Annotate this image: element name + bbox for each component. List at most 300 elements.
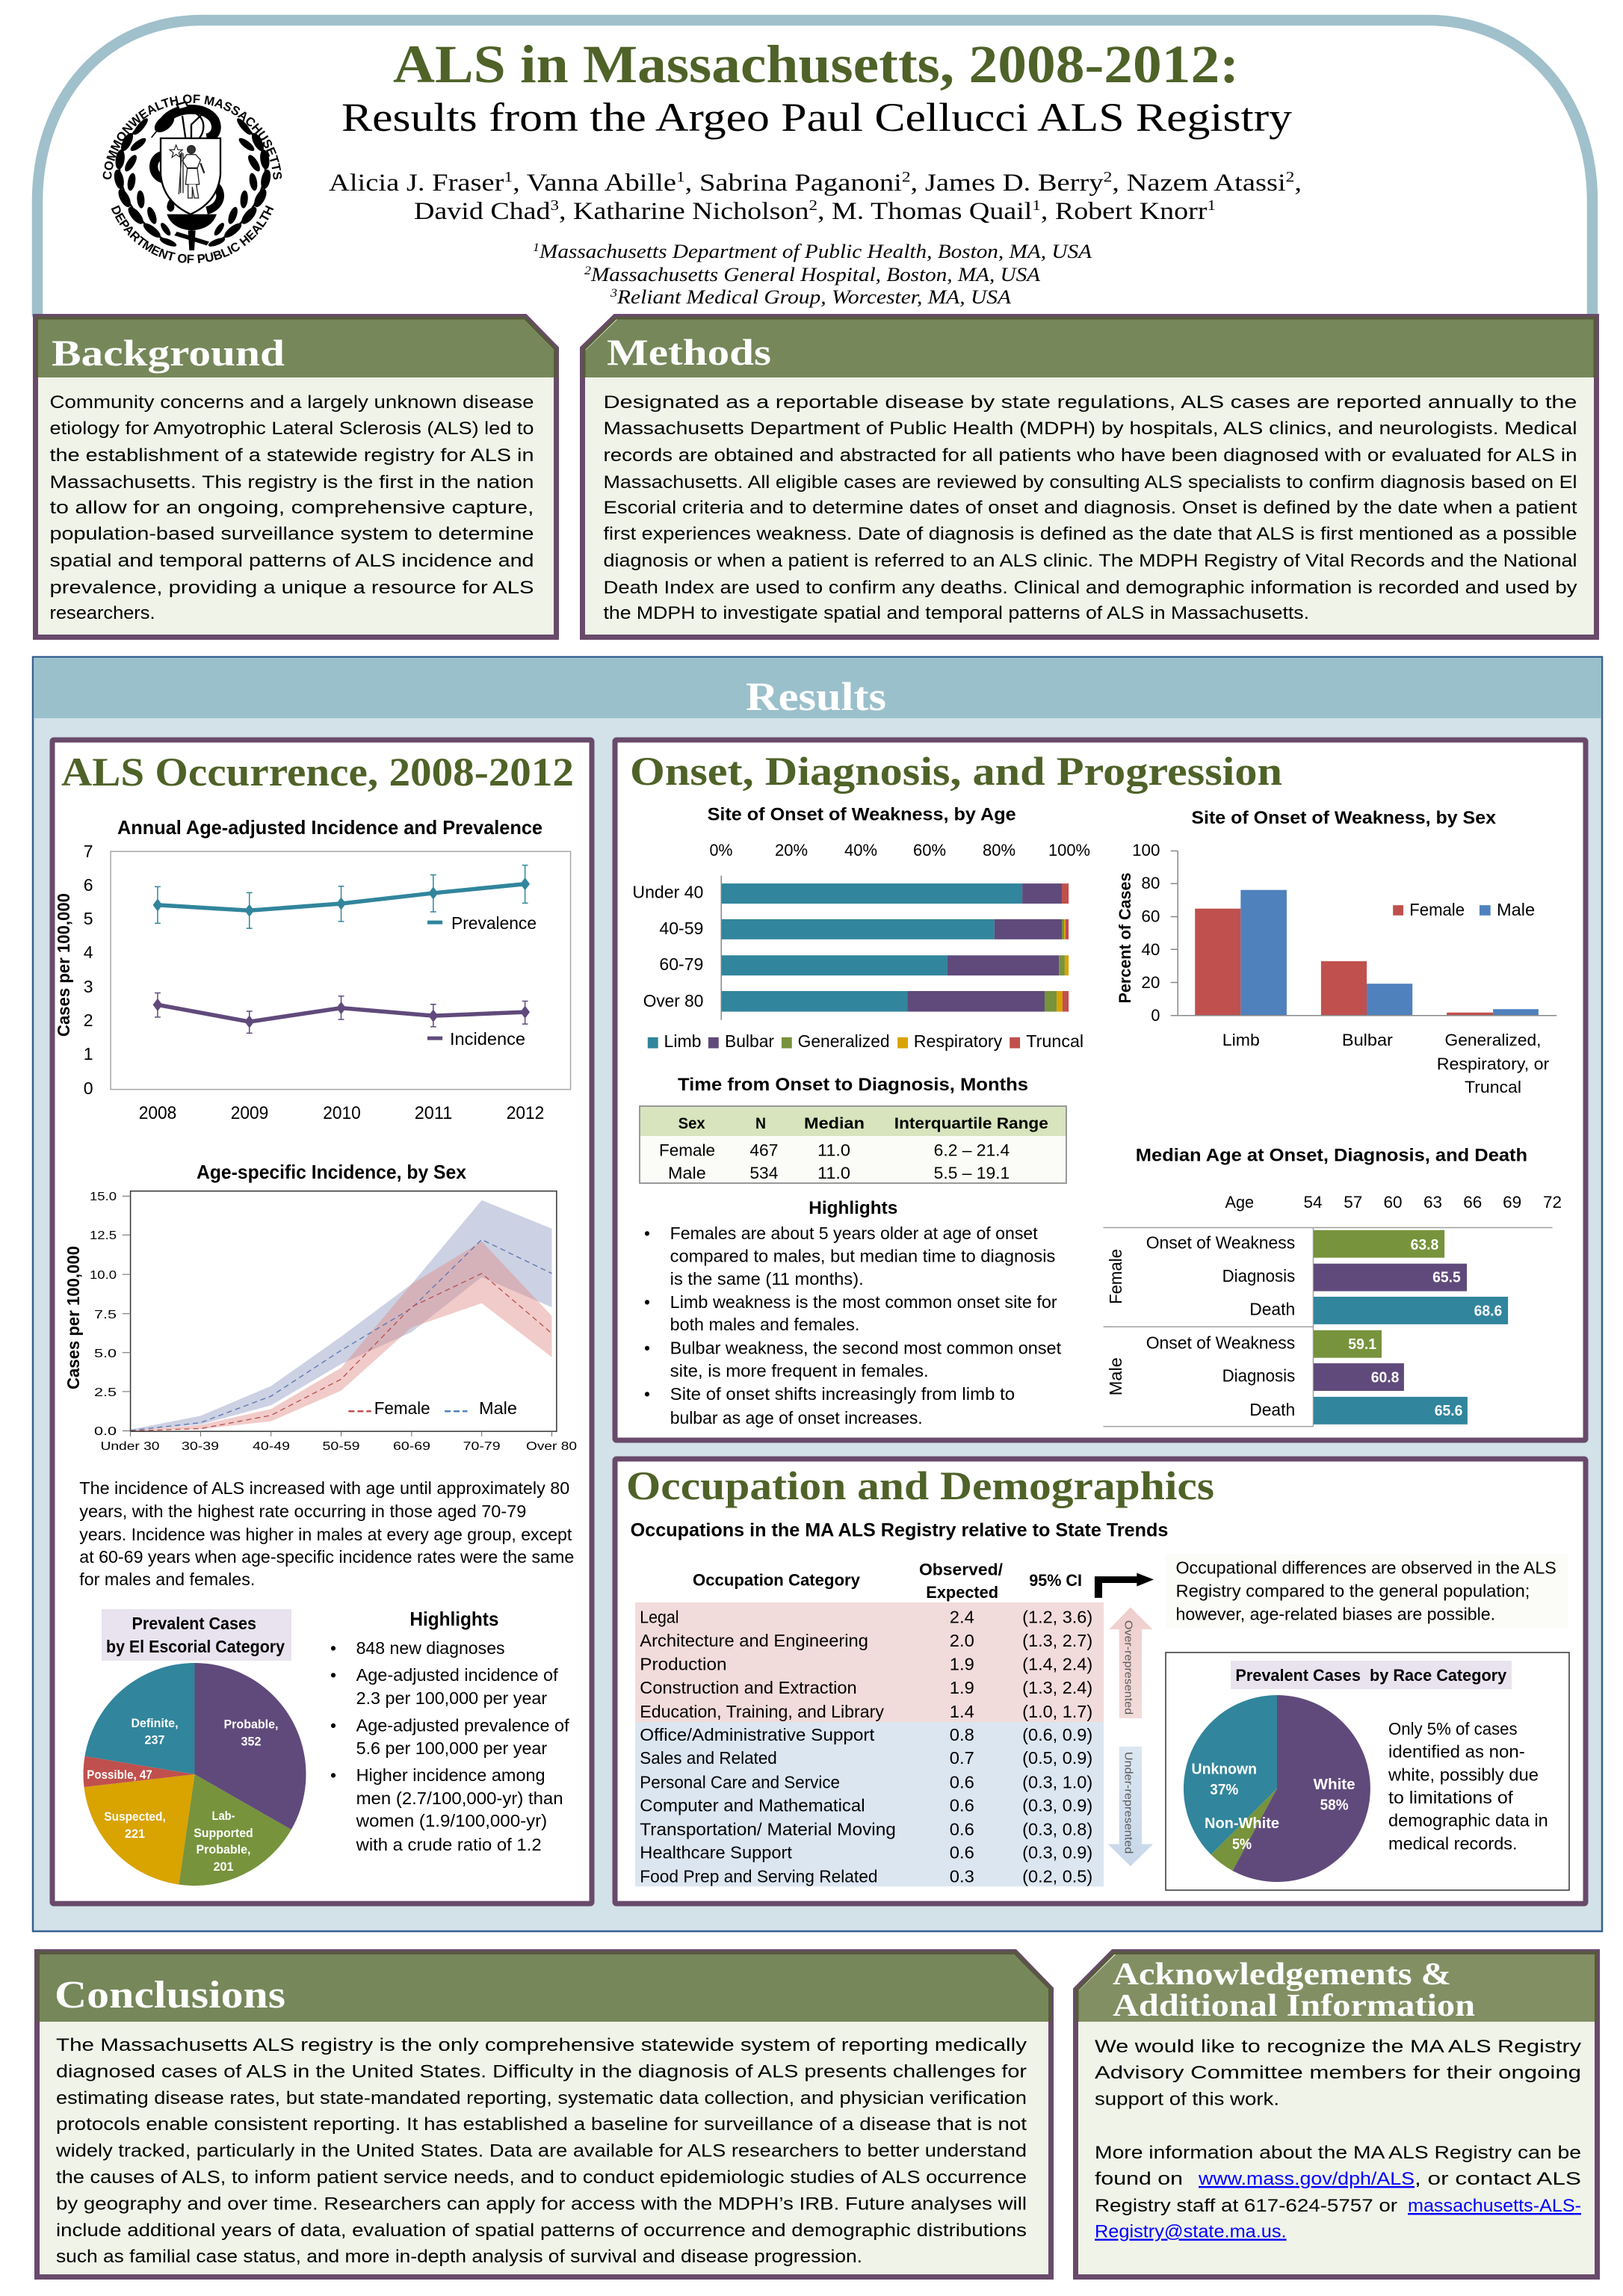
star (170, 145, 182, 158)
heading: conclusions: Conclusions (55, 1974, 285, 2016)
sex group labels: Female (1106, 1249, 1125, 1304)
x axis labels: Under 30 (100, 1440, 160, 1453)
pie note: demographic data in (1388, 1811, 1548, 1830)
highlights list: • (644, 1339, 650, 1358)
authors: , (1294, 170, 1302, 197)
percent axis: 0% (710, 841, 732, 860)
seal text top: COMMONWEALTH OF MASSACHUSETTS (103, 94, 282, 179)
text: acknowledgements: , or contact ALS (1415, 2169, 1581, 2189)
pie note: medical records. (1388, 1834, 1518, 1854)
text: methods: Death Index are used to confirm any deaths. Clinical and demographic information is recorded and used by (604, 578, 1577, 598)
pie labels: Lab- (212, 1809, 235, 1823)
plot lines and markers (111, 851, 571, 1090)
x axis labels: 2012 (507, 1103, 544, 1123)
text: acknowledgements: Advisory Committee members for their ongoing (1095, 2063, 1581, 2083)
heading: occupation: Occupation and Demographics (626, 1463, 1214, 1508)
table body: Sex (678, 1115, 705, 1132)
callout: occupational differences: Registry compared to the general population; (1176, 1581, 1530, 1601)
authors: 1 (1032, 197, 1041, 214)
percent axis: 100% (1048, 841, 1090, 860)
y axis labels (1132, 841, 1160, 1025)
y axis labels: 7 (84, 842, 93, 861)
legend labels: Limb (664, 1031, 701, 1051)
y axis labels: 0 (1151, 1006, 1160, 1025)
highlights list: site, is more frequent in females. (670, 1361, 929, 1380)
observed expected values: 0.6 (950, 1843, 974, 1863)
authors: 2 (902, 169, 911, 185)
sex group labels (1106, 1249, 1125, 1395)
highlights list: Females are about 5 years older at age of onset (670, 1223, 1038, 1243)
highlights list: • (644, 1292, 650, 1312)
authors: 1 (676, 169, 685, 185)
highlights list: 2.3 per 100,000 per year (356, 1688, 548, 1708)
row labels (1146, 1232, 1295, 1419)
authors: , Sabrina Paganoni (685, 170, 902, 197)
observed expected values: 0.6 (950, 1795, 974, 1815)
observed expected values: 0.3 (950, 1867, 974, 1886)
y axis labels: 2.5 (94, 1386, 117, 1399)
authors: 2 (1286, 169, 1294, 185)
authors: , M. Thomas Quail (817, 198, 1032, 225)
bar chart: median age (1103, 1145, 1562, 1427)
pie title: by El Escorial Category (106, 1637, 285, 1656)
observed expected values: 0.7 (950, 1748, 974, 1768)
occupation names: Architecture and Engineering (640, 1631, 868, 1650)
category labels: Limb (1222, 1031, 1260, 1049)
text: methods: Escorial criteria and to determine dates of onset and diagnosis. Onset is defined by the date when a patient (604, 498, 1577, 518)
x axis labels: 2008 (139, 1103, 176, 1123)
highlights list: with a crude ratio of 1.2 (356, 1835, 542, 1854)
y axis labels: 4 (84, 942, 93, 962)
text: incidence description: at 60-69 years when age-specific incidence rates were the same (79, 1547, 574, 1567)
staff (182, 114, 203, 138)
age group labels: Under 40 (632, 883, 703, 902)
text: methods (604, 392, 1577, 623)
table body: Male (668, 1164, 706, 1182)
text: conclusions: widely tracked, particularly in the United States. Data are available for ALS researchers to better understand (55, 2141, 1027, 2161)
observed expected values: 1.9 (950, 1655, 974, 1674)
authors: 2 (809, 197, 817, 214)
text: acknowledgements: massachusetts-ALS- (1408, 2196, 1581, 2216)
affiliations: Massachusetts Department of Public Health, Boston, MA, USA (539, 241, 1092, 262)
pie note: to limitations of (1388, 1788, 1513, 1807)
pie labels: 201 (214, 1860, 233, 1874)
bar values: 60.8 (1371, 1370, 1399, 1386)
column headers: Expected (926, 1583, 998, 1602)
authors: David Chad (414, 198, 533, 225)
legend: incidence: Incidence (450, 1029, 525, 1049)
age axis: 57 (1344, 1193, 1362, 1212)
confidence intervals (1022, 1607, 1092, 1886)
legend labels: Respiratory (914, 1031, 1003, 1051)
text: background: the establishment of a statewide registry for ALS in (49, 445, 534, 466)
panel: conclusions (37, 1952, 1051, 2277)
table body: Female (659, 1141, 715, 1160)
arrow: under-represented (1108, 1747, 1153, 1866)
highlights heading: Highlights (409, 1608, 498, 1630)
occupation names: Computer and Mathematical (640, 1795, 865, 1815)
occupation names: Sales and Related (640, 1748, 777, 1768)
affiliations: Massachusetts General Hospital, Boston, MA, USA (590, 264, 1040, 286)
highlights: occurrence (330, 1608, 569, 1854)
affiliations: 3 (610, 287, 617, 300)
cap (177, 102, 188, 110)
occupation names: Food Prep and Serving Related (640, 1867, 877, 1886)
panel: background (36, 317, 556, 637)
text: background: prevalence, providing a unique a resource for ALS (49, 578, 534, 598)
chart title: Site of Onset of Weakness, by Age (708, 805, 1016, 825)
y axis labels: 12.5 (90, 1229, 117, 1242)
legend male: Male (1497, 900, 1535, 919)
authors (329, 169, 1302, 225)
table body: 5.5 – 19.1 (934, 1164, 1010, 1182)
confidence intervals: (0.3, 1.0) (1022, 1772, 1092, 1792)
y axis labels: 7.5 (94, 1309, 117, 1321)
row labels: Onset of Weakness (1146, 1333, 1295, 1352)
heading: acknowledgements (1113, 1957, 1475, 2023)
highlights list: bulbar as age of onset increases. (670, 1408, 923, 1428)
bar values: 65.5 (1432, 1270, 1461, 1286)
x axis labels: 2010 (323, 1103, 361, 1123)
age axis (1225, 1193, 1562, 1212)
age group labels: 40-59 (659, 919, 703, 938)
occupation names: Healthcare Support (640, 1843, 793, 1863)
highlights list: • (644, 1384, 650, 1404)
row labels: Death (1249, 1299, 1295, 1318)
legend labels (664, 1031, 1083, 1051)
y axis labels: 5 (84, 909, 93, 928)
legend labels: Truncal (1026, 1031, 1083, 1051)
observed expected values (950, 1607, 974, 1886)
pie title: Prevalent Cases (132, 1614, 256, 1633)
table body: 11.0 (817, 1164, 850, 1182)
arrow: under-represented: Under-represented (1122, 1752, 1134, 1854)
highlights list: Higher incidence among (356, 1765, 545, 1785)
text: background: Community concerns and a largely unknown disease (49, 392, 534, 413)
confidence intervals: (1.4, 2.4) (1022, 1655, 1092, 1674)
panel: onset, diagnosis, and progression (615, 740, 1586, 1440)
series: incidence (153, 993, 530, 1038)
occupation names (640, 1607, 896, 1886)
laurel right (207, 117, 272, 248)
observed expected values: 2.0 (950, 1631, 974, 1650)
y axis labels: 5.0 (94, 1348, 117, 1360)
occupation table subtitle: Occupations in the MA ALS Registry relative to State Trends (631, 1520, 1168, 1541)
pie title: Prevalent Cases by Race Category (1235, 1666, 1507, 1685)
x axis labels (139, 1103, 544, 1123)
heading: background: Background (52, 332, 285, 374)
heading: acknowledgements: Additional Information (1113, 1989, 1475, 2023)
age group labels: 60-79 (659, 954, 703, 974)
bar chart: site of onset by sex (1116, 808, 1556, 1096)
pie labels: Probable, (224, 1718, 278, 1731)
text: background: etiology for Amyotrophic Lateral Sclerosis (ALS) led to (49, 419, 534, 439)
laurel left (113, 117, 178, 248)
text: acknowledgements: www.mass.gov/dph/ALS (1198, 2169, 1415, 2189)
pie slices (1184, 1695, 1370, 1882)
occupation names: Construction and Extraction (640, 1678, 857, 1697)
text: conclusions: The Massachusetts ALS registry is the only comprehensive statewide system of reporting medically (56, 2035, 1027, 2055)
legend labels: Female (1409, 900, 1465, 919)
bar values: 68.6 (1474, 1303, 1502, 1320)
chart title: Age-specific Incidence, by Sex (197, 1161, 467, 1183)
confidence intervals: (1.3, 2.7) (1022, 1631, 1092, 1650)
header frame (37, 20, 1592, 317)
age group labels: Over 80 (643, 991, 703, 1010)
text: background: Massachusetts. This registry is the first in the nation (49, 472, 534, 493)
confidence intervals: (1.0, 1.7) (1022, 1702, 1092, 1721)
authors: , Katharine Nicholson (559, 198, 809, 225)
highlights list: both males and females. (670, 1315, 859, 1334)
pie note (1388, 1719, 1548, 1854)
row labels: Diagnosis (1222, 1366, 1295, 1386)
highlights list: is the same (11 months). (670, 1269, 864, 1289)
observed expected values: 0.6 (950, 1819, 974, 1839)
bar values: 63.8 (1411, 1237, 1438, 1253)
subtitle: Results from the Argeo Paul Cellucci ALS Registry (341, 95, 1292, 140)
text: incidence description: years, with the highest rate occurring in those aged 70-79 (79, 1502, 526, 1521)
pie chart panel: race category (1166, 1652, 1569, 1890)
figure (179, 146, 204, 198)
category labels: Generalized, (1445, 1031, 1541, 1049)
pie labels: White (1314, 1777, 1355, 1793)
affiliations: Reliant Medical Group, Worcester, MA, USA (616, 286, 1011, 308)
pie note: white, possibly due (1388, 1765, 1539, 1784)
observed expected values: 1.9 (950, 1678, 974, 1697)
panel: ALS occurrence (52, 740, 592, 1904)
highlights list: • (330, 1665, 336, 1685)
logo: Department of Public Health seal (103, 94, 282, 263)
confidence intervals: (1.2, 3.6) (1022, 1607, 1092, 1626)
arrow: bent arrow to note (1095, 1573, 1154, 1598)
occupation names: Transportation/ Material Moving (640, 1819, 896, 1839)
highlights list (330, 1638, 569, 1854)
x axis labels: 2011 (415, 1103, 452, 1123)
pie labels: Unknown (1192, 1762, 1257, 1778)
flame (167, 198, 174, 212)
highlights list: Site of onset shifts increasingly from limb to (670, 1384, 1015, 1404)
callout: occupational differences: Occupational differences are observed in the ALS (1176, 1558, 1556, 1577)
highlights list: • (330, 1638, 336, 1658)
y axis labels: 40 (1141, 940, 1160, 959)
y axis labels: 10.0 (90, 1269, 117, 1282)
legend labels: Bulbar (725, 1031, 774, 1051)
text: conclusions: include additional years of data, evaluation of spatial patterns of occurrence and demographic distributions (56, 2221, 1027, 2241)
x axis labels: 30-39 (182, 1440, 219, 1453)
y axis title: Cases per 100,000 (64, 1246, 83, 1389)
y axis labels (84, 842, 93, 1098)
occupation names: Legal (640, 1607, 678, 1626)
text: background: to allow for an ongoing, comprehensive capture, (49, 498, 534, 518)
occupation names: Production (640, 1655, 726, 1674)
highlights list: • (644, 1223, 650, 1243)
age axis: 60 (1384, 1193, 1402, 1212)
x axis labels: 40-49 (253, 1440, 290, 1453)
authors: 1 (1207, 197, 1216, 214)
x axis labels (100, 1440, 577, 1453)
heading: acknowledgements: Acknowledgements & (1113, 1957, 1451, 1992)
bars (1171, 851, 1556, 1016)
column headers: 95% CI (1029, 1571, 1082, 1590)
y axis labels: 60 (1141, 907, 1160, 925)
arrow: over-represented (1109, 1607, 1152, 1718)
y axis labels: 2 (84, 1010, 93, 1030)
y axis labels: 15.0 (90, 1191, 117, 1203)
confidence intervals: (0.3, 0.8) (1022, 1819, 1092, 1839)
observed expected values: 0.8 (950, 1725, 974, 1744)
text: conclusions: diagnosed cases of ALS in the United States. Difficulty in the diagnosis of ALS presents challenges for (56, 2061, 1027, 2081)
y axis labels: 0 (84, 1078, 93, 1098)
row labels: Death (1249, 1400, 1295, 1419)
text: conclusions: protocols enable consistent reporting. It has established a baseline for surveillance of a disease that is not (56, 2114, 1027, 2135)
category labels: Bulbar (1342, 1031, 1393, 1049)
highlights list: • (330, 1765, 336, 1785)
bar values: 59.1 (1348, 1336, 1376, 1353)
y axis title: Cases per 100,000 (54, 893, 73, 1037)
shield (161, 138, 220, 215)
area chart: age-specific incidence by sex (64, 1161, 577, 1453)
age axis: 54 (1303, 1193, 1323, 1212)
text: incidence description: for males and females. (79, 1570, 255, 1589)
text: conclusions: by geography and over time. Researchers can apply for access with the MDPH’s IRB. Future analyses will (56, 2194, 1027, 2214)
line chart: incidence and prevalence (54, 816, 571, 1123)
text: background (49, 392, 534, 623)
text: incidence description (79, 1478, 574, 1589)
plot areas and lines (123, 1191, 557, 1436)
panel: occupation and demographics (615, 1459, 1586, 1904)
pie labels: Supported (194, 1826, 253, 1840)
confidence intervals: (0.3, 0.9) (1022, 1843, 1092, 1863)
heading: ALS occurrence: ALS Occurrence, 2008-2012 (61, 750, 574, 794)
y axis labels: 0.0 (94, 1425, 117, 1438)
table body: Median (804, 1115, 865, 1132)
x axis labels: 70-79 (463, 1440, 501, 1453)
pie labels: Definite, (132, 1716, 178, 1730)
main title: ALS in Massachusetts, 2008-2012: (393, 34, 1239, 94)
table body: N (755, 1115, 766, 1132)
authors: Alicia J. Fraser (329, 170, 479, 197)
text: incidence description: The incidence of ALS increased with age until approximately 80 (79, 1478, 569, 1498)
occupation names: Personal Care and Service (640, 1772, 840, 1792)
text: conclusions (55, 2035, 1027, 2267)
affiliations: 1 (533, 241, 540, 254)
legend: prevalence: Prevalence (451, 913, 537, 933)
occupation names: Office/Administrative Support (640, 1725, 875, 1744)
series: prevalence (153, 865, 530, 928)
observed expected values: 1.4 (950, 1702, 974, 1721)
table body: 467 (749, 1141, 778, 1160)
highlights list: compared to males, but median time to diagnosis (670, 1247, 1055, 1266)
confidence intervals: (0.3, 0.9) (1022, 1795, 1092, 1815)
category labels (1222, 1031, 1549, 1096)
x axis labels: Over 80 (526, 1440, 577, 1453)
percent axis: 40% (844, 841, 877, 860)
bowl (167, 215, 217, 250)
heading: onset: Onset, Diagnosis, and Progression (630, 749, 1282, 794)
pie labels: 352 (241, 1734, 262, 1749)
text: conclusions: the causes of ALS, to inform patient service needs, and to conduct epidemiologic studies of ALS occurrence (56, 2167, 1027, 2188)
pie chart: El Escorial category (84, 1609, 306, 1886)
pie title (102, 1609, 291, 1661)
pie labels: Suspected, (104, 1809, 166, 1824)
authors: , Robert Knorr (1041, 198, 1207, 225)
text: conclusions: such as familial case status, and more in-depth analysis of survival and disease progression. (56, 2247, 862, 2267)
percent axis (710, 841, 1090, 860)
authors: , Vanna Abille (513, 170, 676, 197)
authors: 2 (1104, 169, 1112, 185)
pie note: Only 5% of cases (1388, 1719, 1518, 1738)
panel: results (33, 657, 1602, 1931)
text: acknowledgements: Registry@state.ma.us. (1095, 2221, 1287, 2242)
text: methods: first experiences weakness. Date of diagnosis is defined as the date that ALS is first mentioned as a possible (604, 524, 1577, 544)
arrow: over-represented: Over-represented (1122, 1620, 1134, 1715)
highlights list: Limb weakness is the most common onset site for (670, 1292, 1057, 1312)
y axis labels: 100 (1132, 841, 1160, 860)
affiliations (533, 241, 1092, 308)
callout: occupational differences (1166, 1554, 1568, 1629)
legend labels: Generalized (798, 1031, 890, 1051)
heading: methods: Methods (607, 331, 771, 373)
text: background: researchers. (49, 603, 155, 623)
table body: 11.0 (817, 1141, 850, 1160)
chart title: Annual Age-adjusted Incidence and Prevalence (117, 816, 542, 839)
pie labels: Non-White (1205, 1815, 1279, 1832)
age axis: 72 (1543, 1193, 1562, 1212)
occupation names: Education, Training, and Library (640, 1702, 884, 1721)
highlights heading: Highlights (809, 1198, 897, 1218)
pie note: identified as non- (1388, 1741, 1525, 1761)
bar values: 65.6 (1435, 1403, 1462, 1419)
highlights list: men (2.7/100,000-yr) than (356, 1789, 563, 1808)
y axis labels: 80 (1141, 874, 1160, 892)
text: acknowledgements: More information about the MA ALS Registry can be (1095, 2143, 1581, 2163)
table: occupations (635, 1561, 1104, 1886)
pie labels: 37% (1210, 1782, 1239, 1798)
heading: results: Results (746, 674, 886, 719)
confidence intervals: (0.6, 0.9) (1022, 1725, 1092, 1744)
sex group labels: Male (1106, 1357, 1125, 1395)
age axis: 66 (1463, 1193, 1482, 1212)
legend: female: Female (374, 1398, 430, 1418)
observed expected values: 0.6 (950, 1772, 974, 1792)
bars (1103, 1227, 1553, 1427)
observed expected values: 2.4 (950, 1607, 974, 1626)
row labels: Onset of Weakness (1146, 1232, 1295, 1252)
highlights list: • (330, 1716, 336, 1735)
authors: 1 (504, 169, 513, 185)
table body: 534 (749, 1164, 778, 1182)
highlights list: 848 new diagnoses (356, 1638, 505, 1658)
table body: 6.2 – 21.4 (934, 1141, 1010, 1160)
y axis labels: 3 (84, 977, 93, 996)
percent axis: 20% (775, 841, 808, 860)
text: background: spatial and temporal patterns of ALS incidence and (49, 551, 534, 571)
highlights list: 5.6 per 100,000 per year (356, 1738, 548, 1758)
panel: methods (583, 317, 1596, 637)
text: methods: Massachusetts Department of Public Health (MDPH) by hospitals, ALS clinics, and neurologists. Medical (604, 419, 1577, 439)
column headers: Occupation Category (693, 1570, 861, 1589)
column headers: Observed/ (919, 1561, 1003, 1579)
snake (152, 109, 220, 211)
confidence intervals: (0.5, 0.9) (1022, 1748, 1092, 1768)
text: methods: Massachusetts. All eligible cases are reviewed by consulting ALS specialists to confirm diagnosis based on El (604, 472, 1577, 493)
title block (329, 34, 1302, 308)
highlights list: Age-adjusted prevalence of (356, 1716, 569, 1735)
age group labels (632, 883, 703, 1010)
y axis title: Percent of Cases (1116, 873, 1134, 1003)
affiliations: 2 (584, 265, 591, 277)
column headers (693, 1561, 1082, 1602)
